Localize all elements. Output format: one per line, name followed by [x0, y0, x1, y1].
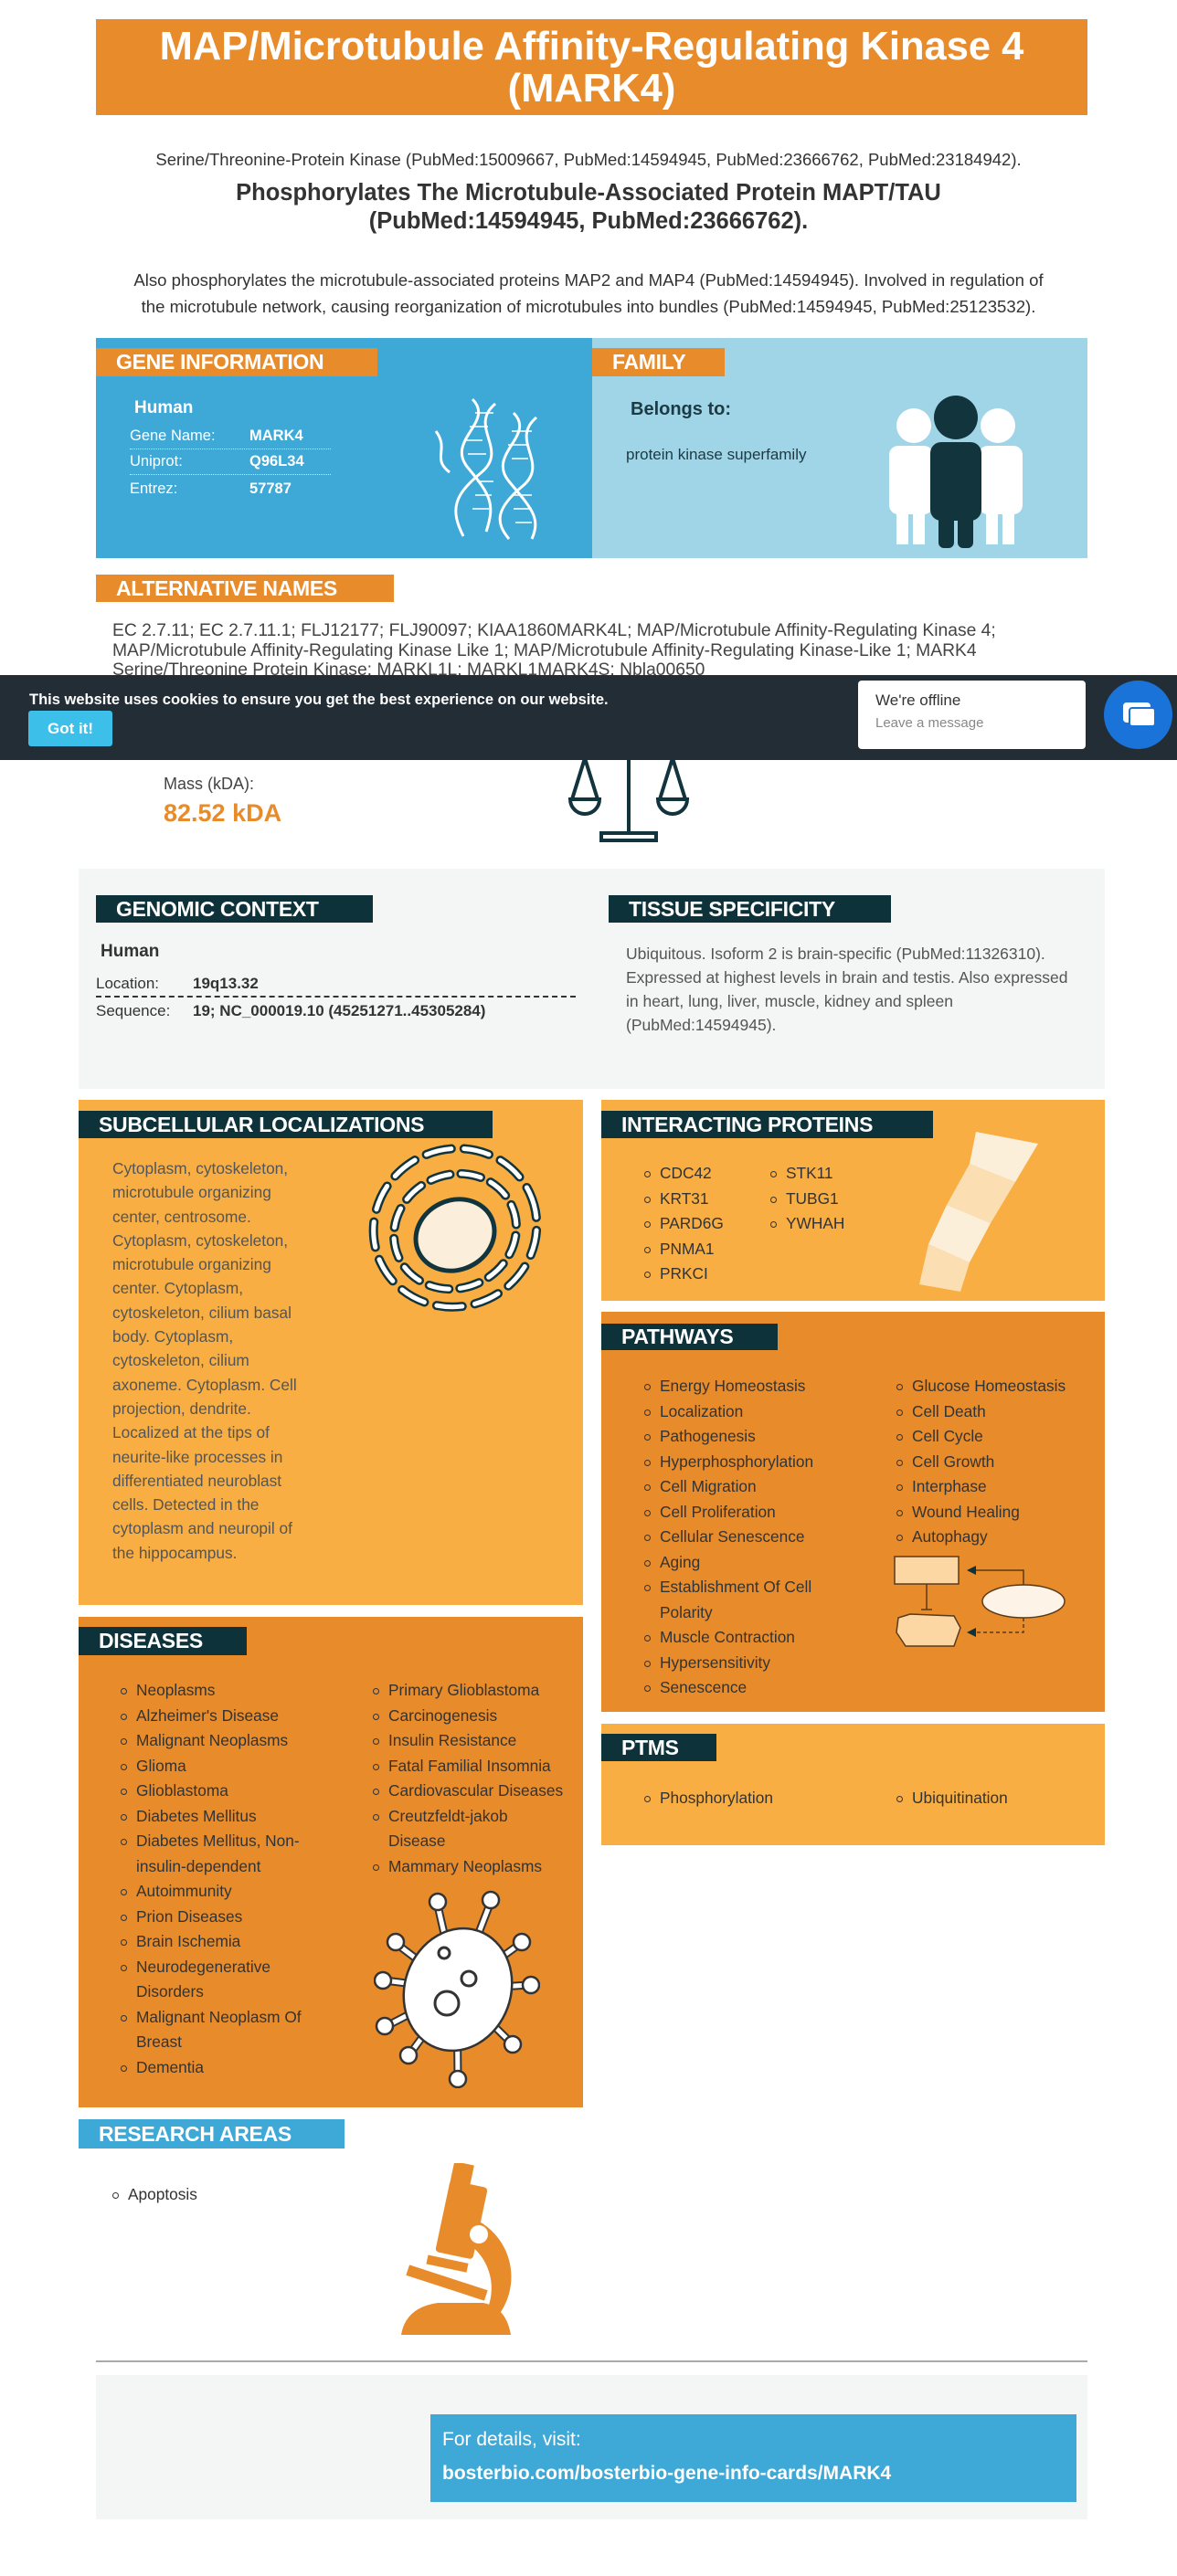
gene info table: Entrez: — [130, 480, 177, 497]
chat box: Leave a message — [875, 715, 983, 731]
list: pathways col 1: Polarity — [660, 1602, 713, 1621]
list: proteins col 2: STK11 — [786, 1164, 833, 1182]
genomic details — [96, 942, 576, 1019]
list: diseases col 1: Diabetes Mellitus, Non- — [136, 1832, 300, 1850]
title: MAP/Microtubule Affinity-Regulating Kinase 4 — [160, 25, 1023, 69]
list: diseases col 1: Dementia — [136, 2057, 204, 2075]
icon: DNA — [435, 398, 537, 540]
list: pathways col 1 — [644, 1377, 813, 1696]
heading: pathways — [601, 1324, 778, 1350]
list: diseases col 1: Disorders — [136, 1982, 204, 2001]
heading: research areas — [79, 2119, 345, 2148]
list: diseases col 2: Mammary Neoplasms — [388, 1856, 542, 1874]
list: pathways col 1: Energy Homeostasis — [660, 1377, 805, 1395]
list: diseases col 2: Primary Glioblastoma — [388, 1681, 539, 1699]
text: tissue specificity: Ubiquitous. Isoform 2 is brain-specific (PubMed:11326310). Expressed at highest levels in brain and testis. Also expressed in heart, lung, liver, muscle, kidney and spleen (PubMed:14594945). — [626, 945, 1067, 1034]
heading: PTMs — [601, 1734, 716, 1761]
intro: description — [133, 270, 1044, 316]
footer panel — [96, 2375, 1087, 2519]
cookie banner — [0, 675, 1177, 760]
chat box — [858, 681, 1086, 749]
intro: function heading: (PubMed:14594945, PubMed:23666762). — [369, 208, 808, 234]
heading: diseases: DISEASES — [99, 1629, 203, 1652]
list: proteins col 1: PNMA1 — [660, 1239, 715, 1257]
heading: pathways: PATHWAYS — [621, 1325, 733, 1348]
panel: interacting proteins — [601, 1100, 1105, 1301]
list: pathways col 1: Muscle Contraction — [660, 1628, 795, 1646]
list: proteins col 1 — [644, 1164, 724, 1283]
title — [96, 19, 1087, 115]
button: got it — [28, 711, 112, 746]
panel: genomic context & tissue — [79, 869, 1105, 1089]
text: mass value: 82.52 kDA — [164, 799, 281, 827]
list: proteins col 1: PRKCI — [660, 1264, 708, 1283]
icon: people — [889, 396, 1023, 548]
list: PTMs col 2: Ubiquitination — [912, 1789, 1008, 1807]
heading: diseases — [79, 1627, 247, 1655]
callout: details link — [430, 2414, 1076, 2502]
heading: tissue specificity — [609, 895, 891, 923]
text: alternative names: EC 2.7.11; EC 2.7.11.1; FLJ12177; FLJ90097; KIAA1860MARK4L; MAP/Microtubule Affinity-Regulating Kinase 4; MAP/Microtubule Affinity-Regulating Kinase Like 1; MAP/Microtubule Affinity-Regulating Kinase-Like 1; MARK4 Serine/Threonine Protein Kinase; MARKL1L; MARKL1MARK4S; Nbla00650 — [112, 621, 996, 680]
intro: description: Also phosphorylates the microtubule-associated proteins MAP2 and MAP4 (PubMed:14594945). Involved in regulation of — [133, 270, 1044, 290]
icon: cell — [369, 1144, 541, 1312]
heading: gene information — [96, 348, 377, 376]
list: pathways col 2: Cell Death — [912, 1401, 986, 1420]
icon: microscope — [401, 2163, 512, 2335]
list: diseases col 1: Breast — [136, 2032, 182, 2051]
list: pathways col 1: Hyperphosphorylation — [660, 1452, 813, 1471]
panel: pathways — [601, 1312, 1105, 1712]
list: diseases col 1: Malignant Neoplasm Of — [136, 2008, 302, 2026]
list: proteins col 2: YWHAH — [786, 1214, 844, 1232]
divider — [96, 2360, 1087, 2362]
list: pathways col 2: Cell Growth — [912, 1452, 994, 1471]
text: belongs to: Belongs to: — [631, 399, 731, 419]
icon: balance scale — [568, 760, 689, 842]
heading: family: FAMILY — [612, 350, 685, 374]
gene info table: MARK4 — [249, 428, 303, 444]
list: research areas: Apoptosis — [128, 2185, 197, 2203]
heading: alternative names: ALTERNATIVE NAMES — [116, 575, 337, 599]
icon: virus — [374, 1891, 540, 2088]
gene info table: Q96L34 — [249, 453, 304, 470]
list: pathways col 2: Cell Cycle — [912, 1427, 983, 1445]
intro: description: the microtubule network, causing reorganization of microtubules into bundles (PubMed:14594945, PubMed:25123532). — [142, 297, 1035, 316]
gene info table: Gene Name: — [130, 428, 216, 444]
icon: chat button — [1104, 681, 1172, 749]
panel: diseases — [79, 1617, 583, 2107]
list: diseases col 1: Glioblastoma — [136, 1781, 228, 1800]
list: pathways col 1: Hypersensitivity — [660, 1653, 770, 1672]
genomic details: Location: — [96, 975, 159, 992]
list: diseases col 1: Malignant Neoplasms — [136, 1731, 288, 1749]
callout: details link: For details, visit: — [442, 2429, 581, 2450]
title: (MARK4) — [508, 67, 675, 111]
list: diseases col 2: Fatal Familial Insomnia — [388, 1756, 551, 1774]
panel: subcellular localizations — [79, 1100, 583, 1605]
list: pathways col 1: Aging — [660, 1553, 700, 1571]
list: diseases col 1: Neoplasms — [136, 1681, 215, 1699]
list: pathways col 2: Glucose Homeostasis — [912, 1377, 1066, 1395]
list: pathways col 2 — [896, 1377, 1066, 1546]
list: proteins col 2: TUBG1 — [786, 1189, 839, 1208]
list: proteins col 1: PARD6G — [660, 1214, 724, 1232]
icon: pathway diagram — [894, 1556, 1066, 1647]
list: diseases col 2: Creutzfeldt-jakob — [388, 1807, 508, 1825]
chat box: We're offline — [875, 692, 960, 709]
list: pathways col 1: Cellular Senescence — [660, 1527, 805, 1546]
gene info table: 57787 — [249, 480, 292, 497]
list: diseases col 2: Disease — [388, 1832, 445, 1850]
list: pathways col 1: Localization — [660, 1401, 743, 1420]
heading: PTMs: PTMS — [621, 1736, 679, 1759]
text: family name: protein kinase superfamily — [626, 446, 806, 463]
gene info table — [130, 398, 331, 497]
gene info table: Uniprot: — [130, 453, 183, 470]
list: diseases col 2: Carcinogenesis — [388, 1706, 497, 1725]
list: pathways col 2: Interphase — [912, 1477, 987, 1495]
list: diseases col 1: Autoimmunity — [136, 1882, 232, 1900]
list: PTMs col 1: Phosphorylation — [660, 1789, 773, 1807]
genomic details: 19; NC_000019.10 (45251271..45305284) — [193, 1002, 485, 1019]
panel: PTMs — [601, 1724, 1105, 1845]
list: diseases col 1: insulin-dependent — [136, 1856, 260, 1874]
list: diseases col 1: Prion Diseases — [136, 1907, 242, 1926]
list: pathways col 1: Establishment Of Cell — [660, 1578, 811, 1596]
heading: tissue specificity: TISSUE SPECIFICITY — [629, 897, 835, 921]
list: diseases col 1: Brain Ischemia — [136, 1932, 240, 1950]
list: proteins col 1: CDC42 — [660, 1164, 712, 1182]
list: diseases col 1: Diabetes Mellitus — [136, 1807, 257, 1825]
gene info table: Human — [134, 398, 193, 417]
text: cookie message: This website uses cookies to ensure you get the best experience on our website. — [29, 692, 609, 708]
text: localizations: Cytoplasm, cytoskeleton, microtubule organizing center, centrosome. Cytoplasm, cytoskeleton, microtubule organizing center. Cytoplasm, cytoskeleton, cilium basal body. Cytoplasm, cytoskeleton, cilium axoneme. Cytoplasm. Cell projection, dendrite. Localized at the tips of neurite-like processes in differentiated neuroblast cells. Detected in the cytoplasm and neuropil of the hippocampus. — [112, 1159, 297, 1562]
heading: alternative names — [96, 575, 394, 602]
icon: ribbon helix — [919, 1132, 1038, 1292]
list: diseases col 2 — [373, 1681, 563, 1874]
list: pathways col 1: Pathogenesis — [660, 1427, 756, 1445]
list: pathways col 2: Autophagy — [912, 1527, 988, 1546]
list: pathways col 2: Wound Healing — [912, 1502, 1020, 1520]
heading: subcellular: SUBCELLULAR LOCALIZATIONS — [99, 1113, 424, 1136]
list: diseases col 2: Insulin Resistance — [388, 1731, 516, 1749]
heading: research areas: RESEARCH AREAS — [99, 2121, 292, 2145]
panel: gene information — [96, 338, 592, 558]
list: diseases col 2: Cardiovascular Diseases — [388, 1781, 563, 1800]
heading: family — [592, 348, 725, 376]
panel: family — [592, 338, 1087, 558]
genomic details: 19q13.32 — [193, 975, 259, 992]
callout: details link: bosterbio.com/bosterbio-gene-info-cards/MARK4 — [442, 2463, 891, 2484]
heading: gene information: GENE INFORMATION — [116, 350, 323, 374]
list: diseases col 1: Alzheimer's Disease — [136, 1706, 279, 1725]
intro: family line: Serine/Threonine-Protein Kinase (PubMed:15009667, PubMed:14594945, PubMed:23666762, PubMed:23184942). — [155, 150, 1022, 169]
list: diseases col 1 — [121, 1681, 302, 2075]
list: diseases col 1: Glioma — [136, 1756, 186, 1774]
list: pathways col 1: Cell Proliferation — [660, 1502, 776, 1520]
list: proteins col 2 — [770, 1164, 844, 1232]
intro: function heading — [236, 180, 941, 234]
genomic details: Human — [101, 942, 159, 961]
heading: genomic context — [96, 895, 373, 923]
button: got it: Got it! — [48, 720, 93, 737]
text: mass label: Mass (kDA): — [164, 775, 254, 793]
heading: subcellular — [79, 1111, 493, 1138]
heading: interacting proteins — [601, 1111, 933, 1138]
list: pathways col 1: Cell Migration — [660, 1477, 757, 1495]
intro: function heading: Phosphorylates The Microtubule-Associated Protein MAPT/TAU — [236, 180, 941, 206]
heading: genomic context: GENOMIC CONTEXT — [116, 897, 319, 921]
list: pathways col 1: Senescence — [660, 1678, 747, 1696]
list: proteins col 1: KRT31 — [660, 1189, 708, 1208]
list: diseases col 1: Neurodegenerative — [136, 1957, 270, 1975]
heading: interacting proteins: INTERACTING PROTEINS — [621, 1113, 873, 1136]
genomic details: Sequence: — [96, 1002, 170, 1019]
